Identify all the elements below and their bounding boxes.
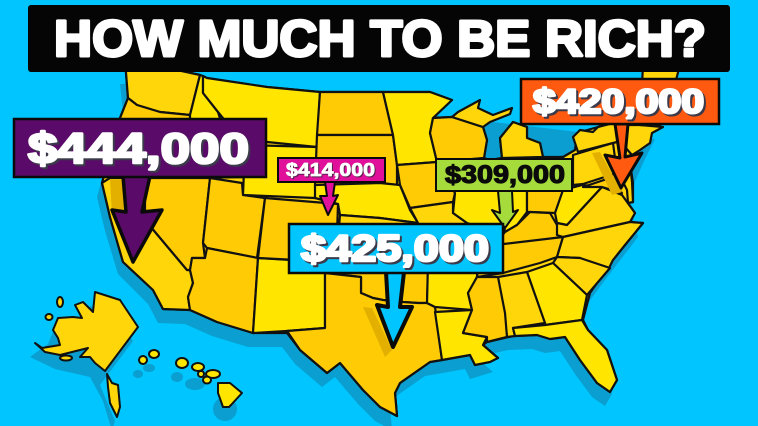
state: Michigan upper peninsula xyxy=(452,100,512,127)
state: Virginia xyxy=(557,187,635,237)
state: Maryland and Delaware xyxy=(583,178,622,193)
state: Florida xyxy=(513,320,617,392)
state: Idaho xyxy=(190,75,245,178)
callout: $420,000 xyxy=(521,79,719,124)
state: Maine xyxy=(640,65,680,125)
callout: $309,000: $309,000 xyxy=(445,161,565,189)
state: South Dakota xyxy=(315,135,397,185)
title banner: HOW MUCH TO BE RICH? xyxy=(54,10,706,67)
state: West Virginia xyxy=(555,185,602,225)
callout: $420,000: $420,000 xyxy=(533,83,704,121)
state: Indiana xyxy=(490,160,527,232)
state: Colorado xyxy=(258,198,338,262)
state: Louisiana xyxy=(435,310,498,365)
state: Mississippi xyxy=(463,277,507,342)
state: Kentucky xyxy=(495,212,563,245)
state: Iowa xyxy=(397,162,455,208)
California decorative shade xyxy=(110,180,124,215)
state: Ohio xyxy=(527,157,563,213)
state: Oklahoma xyxy=(325,262,428,303)
map: Hawaii xyxy=(139,350,242,407)
callout: $414,000: $414,000 xyxy=(286,160,375,180)
state: Utah xyxy=(203,178,265,258)
map shadow xyxy=(30,84,655,426)
state: North Dakota xyxy=(317,92,393,135)
state: Wisconsin xyxy=(430,117,487,162)
map: Alaska xyxy=(35,292,138,417)
arrow: blue xyxy=(377,272,412,347)
land base silhouette xyxy=(102,60,643,416)
state: New York xyxy=(573,120,625,152)
state: Arkansas xyxy=(427,262,478,310)
state: South Carolina xyxy=(553,257,610,295)
state: Nebraska xyxy=(315,183,418,223)
callout: $309,000 xyxy=(436,159,572,191)
callout: $414,000 xyxy=(278,158,385,182)
state: Minnesota xyxy=(383,92,452,165)
state: Montana xyxy=(203,76,320,147)
state: Texas xyxy=(287,273,442,416)
state: Oregon xyxy=(102,98,190,183)
arrow: green xyxy=(492,191,518,228)
state: Missouri xyxy=(410,202,478,262)
state: Nevada xyxy=(145,178,210,270)
arrow: pink xyxy=(320,182,338,215)
state: Alabama xyxy=(498,272,545,337)
Texas decorative shade xyxy=(363,307,392,357)
callout: $444,000 xyxy=(14,119,266,177)
arrow: orange xyxy=(605,124,642,188)
state: Delmarva peninsula xyxy=(622,163,633,203)
state: New England xyxy=(625,125,663,155)
state: Wyoming xyxy=(243,145,317,198)
callout: $444,000: $444,000 xyxy=(28,125,249,173)
state: Arizona xyxy=(188,248,258,333)
state: Washington xyxy=(125,60,200,115)
callout: $425,000 xyxy=(289,224,503,273)
state: Illinois xyxy=(437,160,503,235)
state: North Carolina xyxy=(557,222,643,270)
state: Georgia xyxy=(527,263,587,325)
arrow: purple xyxy=(112,176,162,262)
state: Pennsylvania xyxy=(573,143,617,185)
map: contiguous United States xyxy=(102,60,680,416)
Pennsylvania decorative shade xyxy=(592,152,622,195)
state: New Mexico xyxy=(253,258,325,333)
state: California xyxy=(102,178,193,310)
callout: $425,000: $425,000 xyxy=(301,228,489,269)
state: Kansas xyxy=(336,215,420,262)
state: Michigan lower peninsula xyxy=(500,122,543,158)
state: Tennessee xyxy=(477,237,563,277)
